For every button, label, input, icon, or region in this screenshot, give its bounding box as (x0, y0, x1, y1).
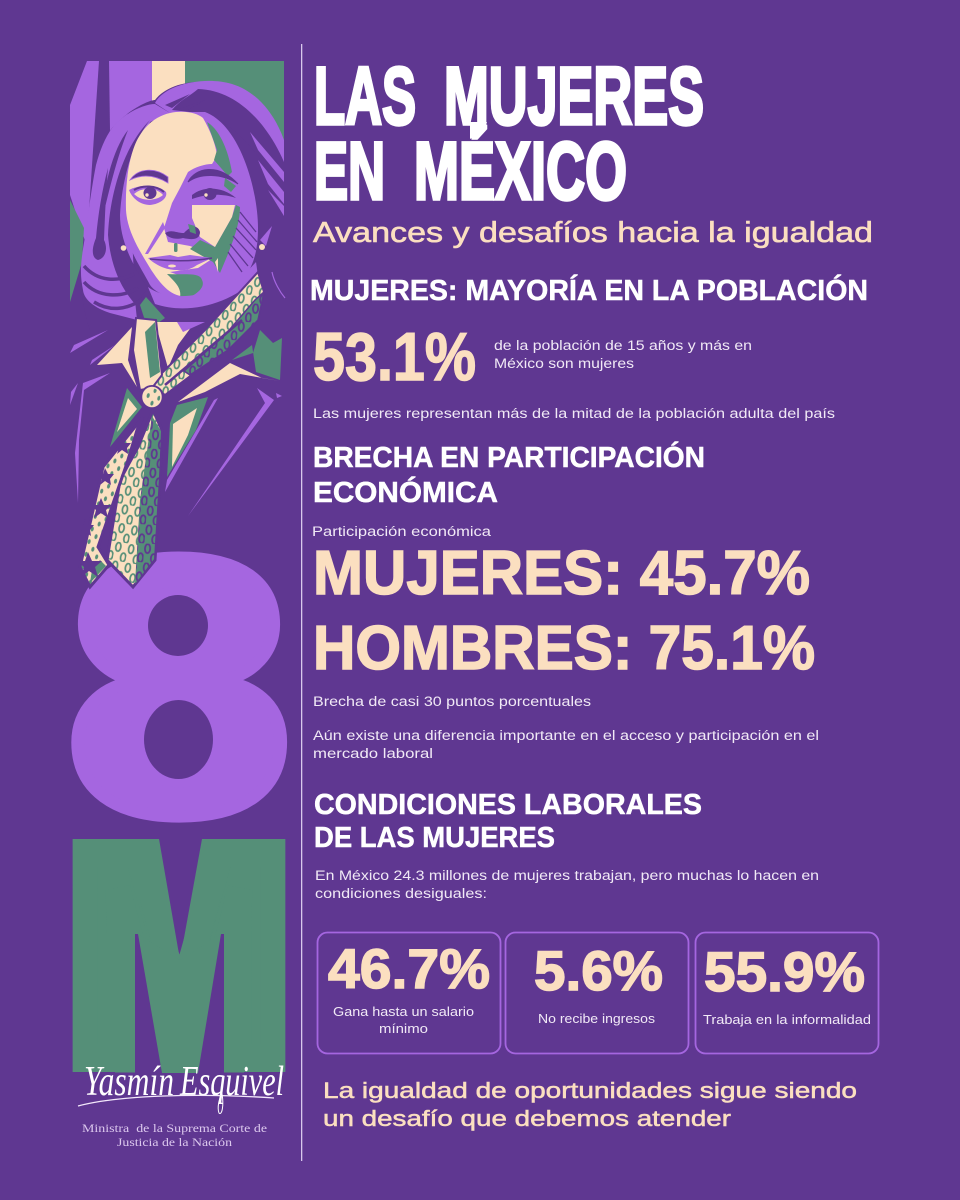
stat description (494, 338, 752, 371)
card: minimum wage: mínimo (379, 1021, 428, 1036)
signature: Esquivel (179, 1059, 284, 1105)
face (123, 112, 258, 308)
card: informal work: Trabaja en la informalidad (703, 1012, 871, 1027)
stat 53.1%: 53.1% (313, 319, 476, 395)
labour conditions intro (315, 868, 819, 901)
section 2 heading: BRECHA EN PARTICIPACIÓN (313, 440, 705, 474)
stat description: de la población de 15 años y más en (494, 338, 752, 353)
title: EN (314, 126, 385, 217)
gap note: Brecha de casi 30 puntos porcentuales (313, 694, 591, 709)
big letter M: M (67, 789, 291, 1122)
section 1 note: Las mujeres representan más de la mitad de la población adulta del país (313, 406, 835, 421)
hair (81, 81, 285, 330)
section 3 heading (314, 789, 702, 854)
card: minimum wage: 46.7% (328, 937, 490, 1000)
closing statement: un desafío que debemos atender (323, 1106, 732, 1131)
labour access note: Aún existe una diferencia importante en el acceso y participación en el (313, 728, 819, 743)
jacket highlights (70, 330, 282, 516)
label: economic participation: Participación económica (312, 524, 492, 539)
labour access note: mercado laboral (313, 746, 433, 761)
stat women: MUJERES: 45.7% (313, 539, 810, 608)
card: no income: 5.6% (534, 939, 663, 1002)
vertical divider (301, 44, 302, 1161)
portrait backdrop colour blocks (70, 61, 284, 302)
labour conditions intro: En México 24.3 millones de mujeres trabajan, pero muchas lo hacen en (315, 868, 819, 883)
closing statement: La igualdad de oportunidades sigue siendo (323, 1078, 857, 1103)
labour conditions intro: condiciones desiguales: (315, 886, 487, 901)
title: LAS (314, 51, 416, 142)
signature role (82, 1123, 267, 1149)
signature (78, 1059, 284, 1114)
title (314, 51, 704, 217)
subtitle: Avances y desafíos hacia la igualdad (313, 217, 873, 249)
stat men: HOMBRES: 75.1% (313, 614, 815, 683)
big number 8: 8 (65, 482, 293, 891)
neck and collar (97, 297, 282, 477)
section 2 heading: ECONÓMICA (313, 475, 498, 509)
card: minimum wage: Gana hasta un salario (333, 1004, 474, 1019)
signature role: Ministra de la Suprema Corte de (82, 1123, 267, 1135)
facial features (121, 169, 272, 270)
title: MUJERES (444, 51, 704, 142)
signature: Yasmín (84, 1059, 174, 1105)
section 2 heading (313, 440, 705, 509)
title: MÉXICO (414, 126, 627, 217)
section 3 heading: DE LAS MUJERES (314, 822, 555, 854)
card: no income (506, 932, 688, 1054)
closing statement (323, 1078, 857, 1131)
section 3 heading: CONDICIONES LABORALES (314, 789, 702, 821)
labour access note (313, 728, 819, 761)
card: informal work: 55.9% (704, 940, 865, 1003)
portrait illustration (70, 61, 285, 587)
section 1 heading: MUJERES: MAYORÍA EN LA POBLACIÓN (310, 273, 868, 307)
scarf (77, 272, 264, 587)
card: minimum wage (318, 932, 500, 1054)
signature role: Justicia de la Nación (117, 1137, 232, 1149)
stat description: México son mujeres (494, 356, 634, 371)
card: no income: No recibe ingresos (538, 1011, 656, 1026)
card: informal work (696, 932, 878, 1054)
